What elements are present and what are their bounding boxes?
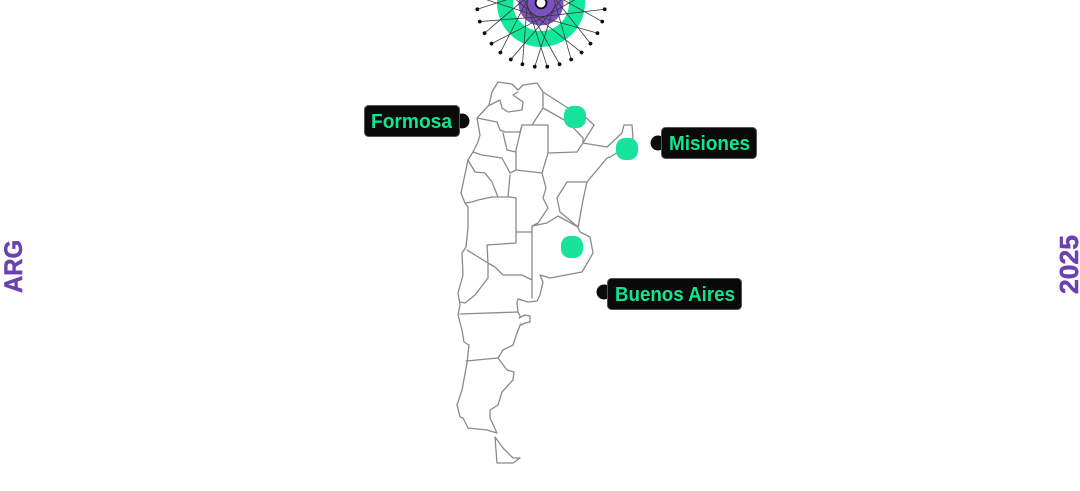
map of Argentina with province borders xyxy=(457,82,633,463)
side label: country code: ARG xyxy=(0,240,28,293)
marker: Formosa xyxy=(564,106,586,128)
province borders xyxy=(460,92,587,361)
label: Buenos Aires: Buenos Aires xyxy=(615,284,735,306)
radial donut chart (cropped at top) xyxy=(474,0,608,70)
label: Misiones xyxy=(650,128,756,158)
country outline xyxy=(457,82,633,433)
marker: Buenos Aires xyxy=(561,236,583,258)
label: Buenos Aires xyxy=(596,278,742,310)
label: Misiones: Misiones xyxy=(669,133,750,155)
marker: Misiones xyxy=(616,138,638,160)
Peninsula Valdes xyxy=(519,315,530,325)
label: Formosa xyxy=(364,106,470,136)
label: Formosa: Formosa xyxy=(371,111,453,133)
Tierra del Fuego xyxy=(495,437,520,463)
